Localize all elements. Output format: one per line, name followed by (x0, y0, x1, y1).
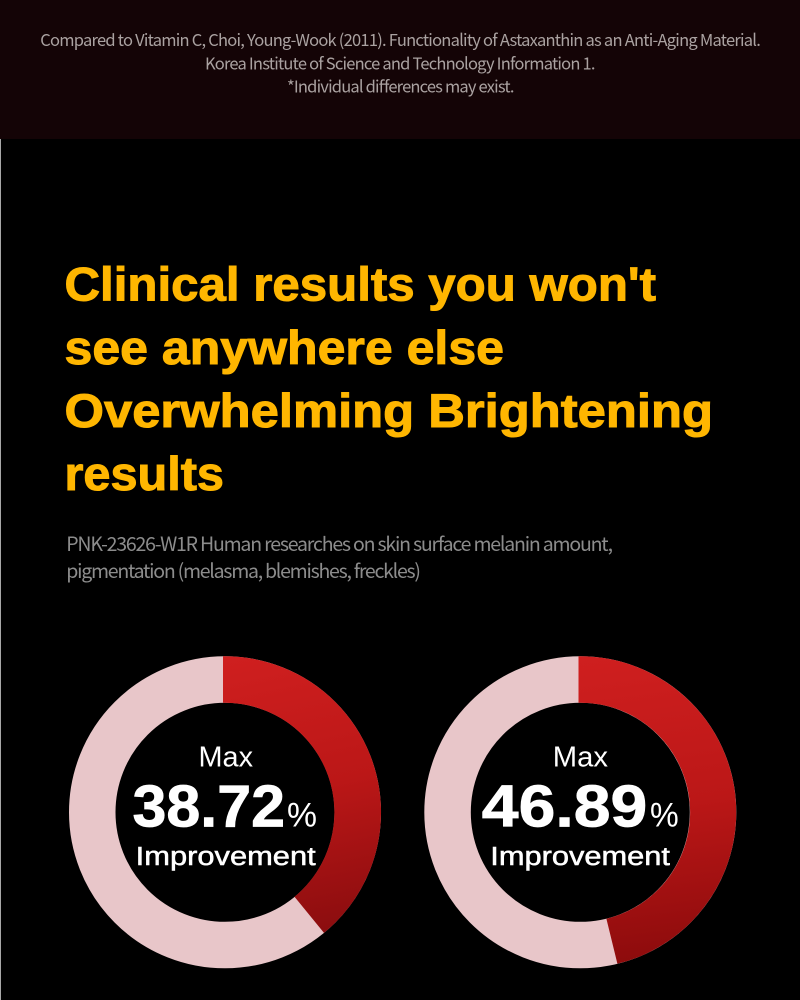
heading: Overwhelming Brightening (64, 385, 713, 438)
text: study description: PNK-23626-W1R Human researches on skin surface melanin amount, (66, 528, 613, 557)
donut label: 38.72%: Max (198, 742, 253, 774)
panel: reference note (0, 0, 800, 139)
donut label: 38.72%: 38.72 (132, 774, 285, 840)
donut label: 46.89%: Improvement (490, 843, 670, 871)
text: citation and disclaimer (40, 27, 761, 98)
arc: 38.72% value (223, 656, 381, 933)
donut label: 46.89%: 46.89 (482, 774, 647, 840)
text: citation and disclaimer: Compared to Vitamin C, Choi, Young-Wook (2011). Functionality of Astaxanthin as an Anti-Aging Material. (40, 27, 761, 51)
heading: results (64, 448, 224, 501)
donut chart: 46.89% improvement (448, 656, 736, 964)
heading: Clinical results you won't (64, 259, 656, 312)
text: citation and disclaimer: *Individual differences may exist. (287, 74, 514, 98)
arc: 46.89% value (578, 656, 736, 964)
text: study description: pigmentation (melasma, blemishes, freckles) (66, 555, 421, 584)
donut label: 38.72%: Improvement (136, 843, 316, 871)
heading (64, 259, 713, 501)
donut label: 46.89%: Max (553, 742, 608, 774)
donut chart: 38.72% improvement (92, 656, 381, 945)
heading: see anywhere else (64, 322, 504, 375)
text: study description (66, 528, 613, 584)
donut label: 38.72% (132, 742, 317, 871)
donut label: 46.89% (482, 742, 679, 871)
donut label: 38.72%: % (287, 796, 317, 834)
text: citation and disclaimer: Korea Institute of Science and Technology Information 1. (205, 50, 596, 74)
donut label: 46.89%: % (650, 796, 679, 834)
